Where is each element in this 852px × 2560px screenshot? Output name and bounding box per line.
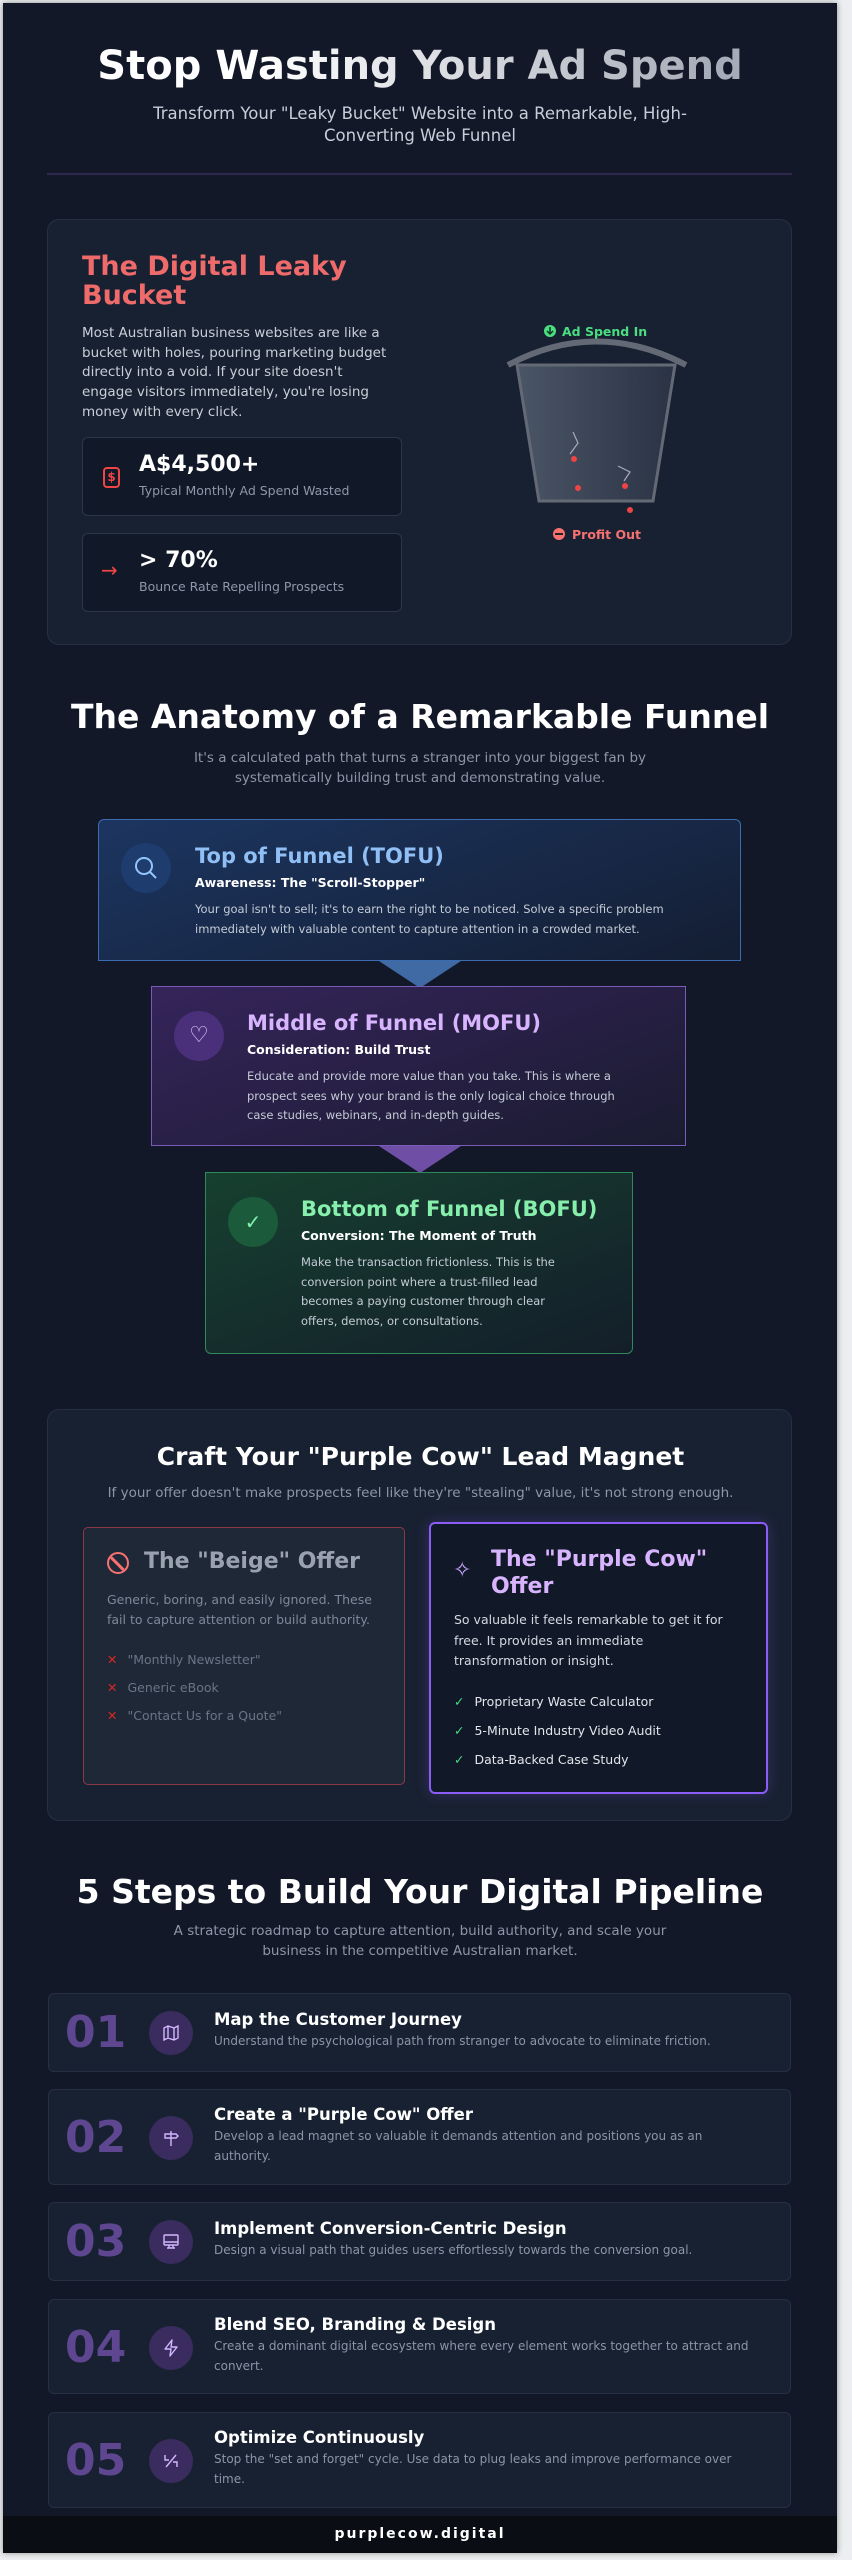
icon: heart <box>174 1011 224 1061</box>
MOFU body: Educate and provide more value than you take. This is where a <box>247 1069 611 1083</box>
MOFU body: case studies, webinars, and in-depth guides. <box>247 1108 504 1122</box>
stat: bounce rate <box>82 533 402 612</box>
MOFU body <box>247 1069 615 1122</box>
MOFU subtitle: Consideration: Build Trust <box>247 1042 430 1057</box>
step 05: Stop the "set and forget" cycle. Use data to plug leaks and improve performance over <box>214 2452 731 2466</box>
MOFU title: Middle of Funnel (MOFU) <box>247 1011 541 1035</box>
text: leaky bucket description: money with every click. <box>82 404 242 420</box>
text: leaky bucket description: bucket with holes, pouring marketing budget <box>82 345 386 361</box>
beige list: ✕ "Monthly Newsletter" <box>107 1652 261 1667</box>
footer <box>3 2516 837 2553</box>
BOFU title: Bottom of Funnel (BOFU) <box>301 1197 597 1221</box>
subtitle: 5 steps: A strategic roadmap to capture attention, build authority, and scale your business in the competitive Australian market. <box>174 1923 666 1958</box>
step 04: Blend SEO, Branding & Design <box>214 2315 496 2334</box>
bucket illustration <box>506 324 688 542</box>
panel: TOFU <box>98 819 741 961</box>
step 02 <box>48 2089 791 2185</box>
beige list: ✕ Generic eBook <box>107 1680 219 1695</box>
icon: sparkles: ✧ <box>453 1558 471 1583</box>
subtitle: Transform Your "Leaky Bucket" Website into a Remarkable, High-Converting Web Funnel <box>153 104 687 145</box>
step 01 <box>48 1993 791 2072</box>
panel: leaky bucket <box>47 219 792 645</box>
purple list: ✓ Data-Backed Case Study <box>454 1752 629 1767</box>
purple list <box>454 1694 661 1767</box>
TOFU subtitle: Awareness: The "Scroll-Stopper" <box>195 875 425 890</box>
heading: anatomy: The Anatomy of a Remarkable Funnel <box>71 697 769 736</box>
step 03 <box>48 2202 791 2281</box>
BOFU body: Make the transaction frictionless. This is the <box>301 1255 555 1269</box>
panel: purple cow lead magnet <box>47 1409 792 1821</box>
step 05: 05 <box>65 2435 126 2486</box>
icon: bolt <box>149 2326 193 2370</box>
card: beige offer <box>83 1527 405 1785</box>
icon: check: ✓ <box>245 1210 261 1234</box>
heading: lead magnet: Craft Your "Purple Cow" Lead Magnet <box>157 1442 684 1471</box>
title: Stop Wasting Your Ad Spend <box>97 43 743 89</box>
purple body: transformation or insight. <box>454 1653 614 1668</box>
BOFU body <box>301 1255 555 1328</box>
beige body: fail to capture attention or build authority. <box>107 1612 370 1626</box>
MOFU body: prospect sees why your brand is the only logical choice through <box>247 1088 615 1102</box>
icon: percent <box>149 2439 193 2483</box>
BOFU subtitle: Conversion: The Moment of Truth <box>301 1228 536 1243</box>
beige title: The "Beige" Offer <box>144 1549 360 1574</box>
icon: monitor <box>149 2220 193 2264</box>
purple body: So valuable it feels remarkable to get it for <box>454 1612 723 1627</box>
icon: search <box>121 843 171 893</box>
step 04: Create a dominant digital ecosystem where every element works together to attract and <box>214 2339 748 2353</box>
text: leaky bucket description: engage visitors immediately, you're losing <box>82 384 369 400</box>
stat value: > 70% <box>139 548 218 573</box>
step 02: Create a "Purple Cow" Offer <box>214 2105 473 2124</box>
purple body <box>454 1612 723 1668</box>
stat label: Bounce Rate Repelling Prospects <box>139 579 344 594</box>
icon: prohibited <box>107 1552 129 1574</box>
step 02: 02 <box>65 2112 126 2163</box>
card: purple cow offer <box>429 1522 768 1794</box>
stat label: Typical Monthly Ad Spend Wasted <box>139 483 349 498</box>
bucket illustration: Ad Spend In <box>562 324 647 339</box>
beige body <box>107 1592 372 1626</box>
step 01: 01 <box>65 2007 126 2058</box>
arrow: TOFU to MOFU <box>379 961 461 988</box>
step 02: authority. <box>214 2148 271 2162</box>
step 05: time. <box>214 2472 245 2486</box>
purple body: free. It provides an immediate <box>454 1632 643 1648</box>
BOFU body: offers, demos, or consultations. <box>301 1314 483 1328</box>
subtitle: anatomy: It's a calculated path that turns a stranger into your biggest fan by systematically building trust and demonstrating value. <box>194 750 646 786</box>
icon: arrow: → <box>101 558 118 582</box>
step 04: 04 <box>65 2322 126 2373</box>
panel: BOFU <box>205 1172 633 1354</box>
BOFU body: conversion point where a trust-filled lead <box>301 1274 538 1288</box>
purple title: The "Purple Cow" Offer <box>491 1547 707 1599</box>
TOFU body: immediately with valuable content to capture attention in a crowded market. <box>195 922 640 936</box>
step 03: 03 <box>65 2216 126 2267</box>
beige body: Generic, boring, and easily ignored. These <box>107 1592 372 1607</box>
icon: check <box>228 1197 278 1247</box>
purple list: ✓ 5-Minute Industry Video Audit <box>454 1723 661 1738</box>
arrow: MOFU to BOFU <box>379 1146 461 1173</box>
BOFU body: becomes a paying customer through clear <box>301 1294 545 1308</box>
TOFU body <box>195 902 664 936</box>
step 03: Design a visual path that guides users effortlessly towards the conversion goal. <box>214 2243 692 2257</box>
step 03: Implement Conversion-Centric Design <box>214 2219 567 2238</box>
icon: heart: ♡ <box>189 1023 209 1048</box>
step 02: Develop a lead magnet so valuable it demands attention and positions you as an <box>214 2129 702 2143</box>
icon: signpost <box>149 2116 193 2160</box>
heading: leaky bucket: The Digital Leaky Bucket <box>82 251 347 311</box>
step 05: Optimize Continuously <box>214 2428 424 2447</box>
text: leaky bucket description: directly into a void. If your site doesn't <box>82 364 343 380</box>
text: leaky bucket description: Most Australian business websites are like a <box>82 325 380 341</box>
step 01: Understand the psychological path from stranger to advocate to eliminate friction. <box>214 2034 711 2048</box>
panel: MOFU <box>151 986 686 1146</box>
purple list: ✓ Proprietary Waste Calculator <box>454 1694 653 1709</box>
step 04: convert. <box>214 2358 263 2372</box>
icon: dollar <box>103 467 120 488</box>
footer: purplecow.digital <box>334 2526 506 2542</box>
stat: ad spend wasted <box>82 437 402 516</box>
step 05 <box>48 2412 791 2508</box>
heading: 5 steps: 5 Steps to Build Your Digital Pipeline <box>77 1872 763 1911</box>
bucket illustration: Profit Out <box>572 527 641 542</box>
TOFU title: Top of Funnel (TOFU) <box>195 844 444 868</box>
icon: map <box>149 2011 193 2055</box>
step 04 <box>48 2299 791 2394</box>
icon: dollar: $ <box>107 470 116 484</box>
step 01: Map the Customer Journey <box>214 2010 462 2029</box>
TOFU body: Your goal isn't to sell; it's to earn the right to be noticed. Solve a specific problem <box>195 902 664 916</box>
text: leaky bucket description <box>82 325 386 420</box>
stat value: A$4,500+ <box>139 452 259 477</box>
beige list: ✕ "Contact Us for a Quote" <box>107 1708 282 1723</box>
subtitle: lead magnet: If your offer doesn't make prospects feel like they're "stealing" value, it's not strong enough. <box>108 1485 733 1501</box>
beige list <box>107 1652 282 1723</box>
